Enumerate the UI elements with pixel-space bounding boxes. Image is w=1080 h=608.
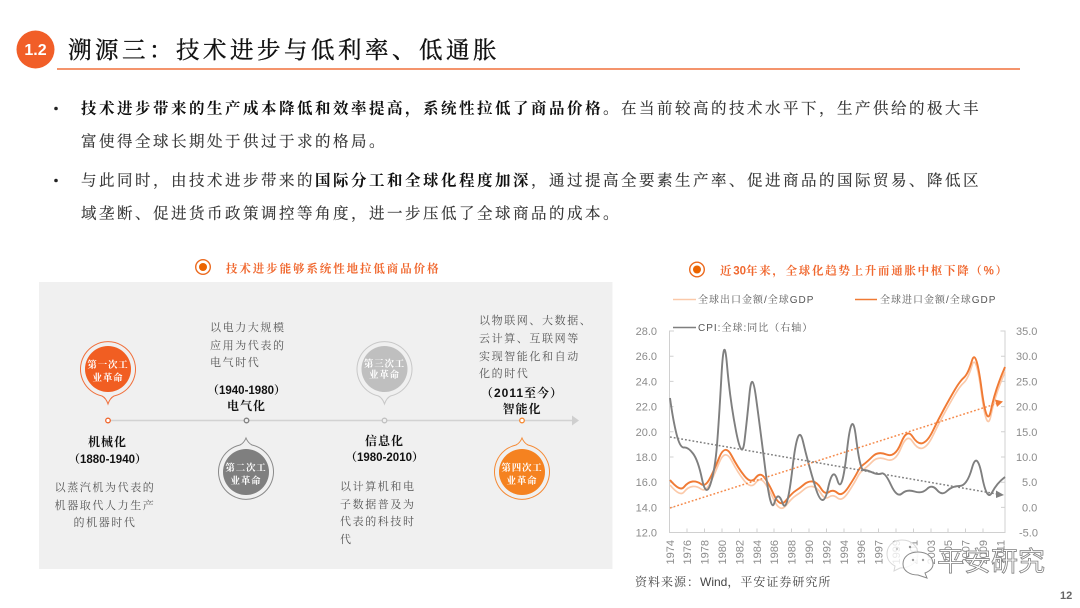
left y axis labels: 14.0 [636, 502, 657, 514]
stage: informatization: （1980-2010） [346, 451, 424, 464]
x axis labels: 1986 [769, 540, 781, 564]
stage: mechanization: （1880-1940） [68, 453, 146, 466]
x axis labels: 1990 [804, 540, 816, 564]
left y axis labels: 16.0 [636, 477, 657, 489]
stage: intelligentization: 化的时代 [479, 366, 529, 380]
section number badge: 1.2 [24, 42, 47, 59]
stage: informatization: 代 [340, 533, 353, 546]
trend arrow: globalization rising [670, 400, 1003, 508]
icon: chat bubbles [887, 540, 933, 578]
watermark [887, 540, 1045, 579]
stage: mechanization [55, 434, 155, 529]
pin: third industrial revolution: 业革命 [369, 369, 400, 381]
x axis labels: 1978 [700, 540, 712, 564]
page number: 12 [1060, 590, 1072, 602]
x axis labels: 2001 [908, 540, 920, 564]
left y axis labels: 20.0 [636, 427, 657, 439]
bullet 1 [54, 98, 981, 150]
stage: electrification: 电气时代 [210, 355, 260, 369]
pin: second industrial revolution [218, 438, 273, 499]
x axis labels: 2009 [978, 540, 990, 564]
left y axis labels: 24.0 [636, 376, 657, 388]
stage: electrification: 电气化 [227, 398, 266, 413]
bullet 2 [54, 170, 981, 222]
stage: informatization: 以计算机和电 [340, 479, 416, 493]
bullet 2: 与此同时，由技术进步带来的国际分工和全球化程度加深，通过提高全要素生产率、促进商品的国际贸易、降低区 [81, 170, 981, 190]
right y axis labels: 15.0 [1016, 427, 1037, 439]
stage: informatization: 子数据普及为 [340, 497, 416, 511]
x axis labels: 1984 [752, 540, 764, 564]
x axis labels: 1988 [786, 540, 798, 564]
stage: electrification: 应用为代表的 [210, 338, 286, 352]
right y axis labels: 0.0 [1022, 502, 1037, 514]
right y axis labels: 5.0 [1022, 477, 1037, 489]
legend [673, 293, 996, 334]
stage: intelligentization: （2011至今） [481, 385, 563, 400]
x axis labels: 1999 [891, 540, 903, 564]
timeline arrow [106, 416, 579, 426]
bullet text block [54, 98, 981, 222]
left y axis labels: 28.0 [636, 326, 657, 338]
stage: electrification: （1940-1980） [208, 384, 286, 397]
x axis labels: 2003 [926, 540, 938, 564]
stage: intelligentization: 以物联网、大数据、 [479, 313, 592, 327]
stage: mechanization: 的机器时代 [74, 515, 136, 529]
stage: intelligentization: 云计算、互联网等 [479, 331, 580, 345]
left panel: industrial revolutions timeline [39, 260, 612, 569]
stage: intelligentization: 实现智能化和自动 [479, 349, 580, 363]
x axis labels: 1976 [682, 540, 694, 564]
legend: CPI:全球:同比（右轴） [698, 321, 813, 334]
x axis labels [665, 540, 1008, 564]
x axis labels: 1996 [856, 540, 868, 564]
bullet 1: 技术进步带来的生产成本降低和效率提高，系统性拉低了商品价格。在当前较高的技术水平下，生产供给的极大丰 [81, 98, 981, 118]
stage: intelligentization [479, 313, 592, 416]
left y axis labels: 26.0 [636, 351, 657, 363]
pin: third industrial revolution: 第三次工 [364, 358, 405, 370]
section number badge [16, 30, 54, 68]
x axis labels: 2005 [943, 540, 955, 564]
source note: 资料来源：Wind，平安证券研究所 [635, 574, 831, 589]
right panel: chart [635, 262, 1038, 589]
x axis labels: 1994 [839, 540, 851, 564]
stage: electrification: 以电力大规模 [210, 320, 286, 334]
bullet 1: 富使得全球长期处于供过于求的格局。 [81, 132, 387, 150]
stage: mechanization: 机械化 [88, 434, 127, 449]
right y axis labels: 25.0 [1016, 376, 1037, 388]
right y axis labels: -5.0 [1019, 528, 1038, 540]
x axis labels: 1982 [734, 540, 746, 564]
pin: first industrial revolution: 第一次工 [87, 359, 129, 371]
pin: second industrial revolution: 第二次工 [225, 462, 267, 474]
right y axis labels: 20.0 [1016, 402, 1037, 414]
left y axis labels: 18.0 [636, 452, 657, 464]
chart heading: 近30年来，全球化趋势上升而通胀中枢下降（%） [720, 264, 1009, 278]
x axis labels: 1974 [665, 540, 677, 564]
x axis labels: 2007 [960, 540, 972, 564]
pin: third industrial revolution [357, 342, 412, 404]
right y axis labels: 30.0 [1016, 351, 1037, 363]
pin: fourth industrial revolution: 第四次工 [501, 462, 543, 474]
stage: informatization: 信息化 [365, 433, 404, 448]
watermark text: 平安研究 [937, 540, 1045, 579]
x axis labels: 1997 [874, 540, 886, 564]
x axis labels: 1992 [822, 540, 834, 564]
stage: mechanization: 机器取代人力生产 [55, 498, 155, 512]
stage: informatization: 代表的科技时 [340, 514, 416, 528]
x axis labels: 1980 [717, 540, 729, 564]
pin: first industrial revolution: 业革命 [93, 372, 123, 384]
left panel heading [196, 260, 440, 276]
bullet 2: 域垄断、促进货币政策调控等角度，进一步压低了全球商品的成本。 [81, 204, 621, 222]
trend arrow: inflation falling [670, 437, 1004, 498]
left y axis labels [636, 326, 657, 540]
right y axis labels: 35.0 [1016, 326, 1037, 338]
stage: intelligentization: 智能化 [502, 401, 542, 416]
legend: 全球进口金额/全球GDP [880, 293, 996, 306]
right y axis labels: 10.0 [1016, 452, 1037, 464]
stage: informatization [340, 433, 424, 546]
pin: first industrial revolution [80, 342, 136, 404]
pin: second industrial revolution: 业革命 [231, 475, 261, 487]
right y axis labels [1016, 326, 1038, 540]
section header [16, 30, 1020, 69]
series: export share of GDP [670, 362, 1005, 508]
pin: fourth industrial revolution [494, 438, 550, 499]
left y axis labels: 22.0 [636, 402, 657, 414]
left panel heading: 技术进步能够系统性地拉低商品价格 [226, 262, 440, 276]
title: 溯源三：技术进步与低利率、低通胀 [68, 37, 500, 63]
series: import share of GDP [670, 357, 1005, 503]
stage: electrification [208, 320, 286, 413]
legend: 全球出口金额/全球GDP [698, 293, 814, 306]
x axis labels: 2011 [996, 540, 1008, 564]
stage: mechanization: 以蒸汽机为代表的 [55, 480, 155, 494]
left y axis labels: 12.0 [636, 528, 657, 540]
axes [670, 331, 1005, 532]
pin: fourth industrial revolution: 业革命 [507, 475, 537, 487]
series: global CPI [670, 350, 1005, 506]
